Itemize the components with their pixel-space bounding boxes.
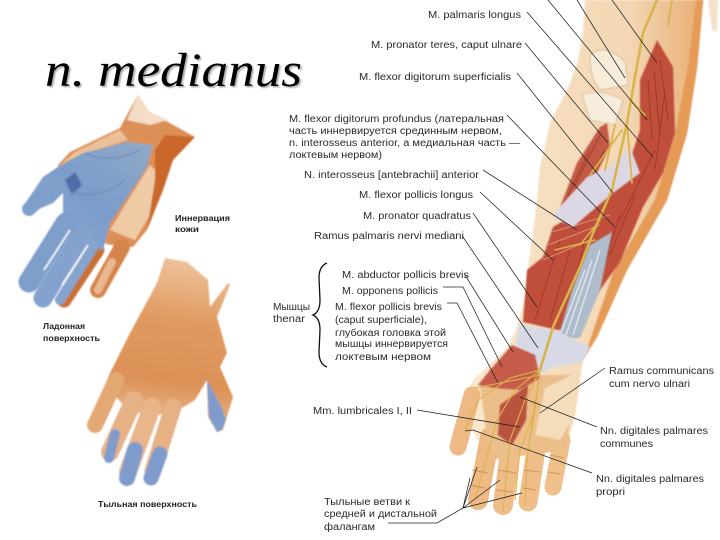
label: pronator quadratus: M. pronator quadratus xyxy=(363,211,471,222)
label: ramus communicans: cum nervo ulnari xyxy=(609,379,690,390)
label: flexor pollicis brevis: локтевым нервом xyxy=(335,352,431,363)
illustration: dorsal hand xyxy=(95,258,233,478)
orange ulnar edge xyxy=(147,135,195,230)
little finger xyxy=(98,247,122,290)
little finger xyxy=(553,440,562,487)
label: flexor pollicis brevis xyxy=(335,302,448,363)
ring finger xyxy=(528,443,537,502)
arm silhouette xyxy=(460,0,703,460)
label: ramus communicans: Ramus communicans xyxy=(609,366,714,377)
label: dorsal branches xyxy=(324,497,437,533)
label: digitales proprii: propri xyxy=(596,487,625,498)
label: dorsal branches: фалангам xyxy=(324,521,375,533)
label: dorsal branches: Тыльные ветви к xyxy=(324,497,411,508)
dorsal ring finger xyxy=(110,400,134,452)
median nerve trunk and branches xyxy=(465,0,672,510)
muscle fibre striping xyxy=(535,60,668,320)
label: flexor pollicis brevis: мышцы иннервируется xyxy=(335,339,448,350)
elbow bones xyxy=(590,50,628,90)
label: ramus communicans xyxy=(609,366,714,390)
label: thenar muscles: Мышцы xyxy=(273,302,310,313)
caption: palmar surface: Ладонная xyxy=(43,321,85,331)
blue half of ring finger xyxy=(60,246,94,300)
label: ramus palmaris: Ramus palmaris nervi mediani xyxy=(314,231,464,242)
label: flexor digitorum profundus xyxy=(289,114,520,161)
illustration: forearm and hand dissection xyxy=(458,0,718,510)
label: flexor digitorum profundus: локтевым нервом) xyxy=(289,150,382,161)
index finger xyxy=(478,437,490,500)
caption: dorsal surface: Тыльная поверхность xyxy=(98,499,197,509)
lower tendon bundle xyxy=(558,232,612,338)
thenar and palm muscles xyxy=(478,345,540,390)
label: thenar muscles xyxy=(273,302,310,325)
labels: forearm muscles and nerves xyxy=(273,10,714,533)
middle finger xyxy=(503,437,512,505)
label: opponens pollicis: M. opponens pollicis xyxy=(342,286,438,297)
label: flexor digitorum profundus: часть иннервируется срединным нервом, xyxy=(289,126,502,137)
big forearm muscle mass xyxy=(523,40,675,330)
caption: palmar surface xyxy=(43,321,100,343)
dorsal middle finger xyxy=(128,407,152,472)
label: thenar muscles: thenar xyxy=(273,314,306,325)
flexor retinaculum at wrist xyxy=(515,325,590,375)
labels: hand captions xyxy=(43,213,230,509)
label: dorsal branches: средней и дистальной xyxy=(324,509,437,520)
caption: skin innervation: кожи xyxy=(175,224,199,234)
title: n. medianus xyxy=(45,44,302,97)
label: pronator teres: M. pronator teres, caput ulnare xyxy=(371,40,522,51)
label: digitales communes: Nn. digitales palmares xyxy=(600,426,708,437)
blue thumb xyxy=(29,183,57,209)
blue sensory zone on palm xyxy=(24,142,153,250)
lavender tendon sheet xyxy=(553,147,640,227)
label: flexor pollicis brevis: M. flexor pollicis brevis xyxy=(335,302,442,313)
label: digitales communes xyxy=(600,426,708,450)
label: lumbricales: Mm. lumbricales I, II xyxy=(313,406,412,417)
caption: skin innervation xyxy=(175,213,230,234)
blue fingertip zones on dorsal hand xyxy=(207,380,226,432)
dorsal little finger xyxy=(95,380,116,425)
label: flexor pollicis brevis: глубокая головка этой xyxy=(335,327,446,339)
blue palm dark crease xyxy=(65,172,82,195)
white finger gaps xyxy=(44,230,112,285)
label: digitales proprii: Nn. digitales palmares xyxy=(596,474,704,485)
dorsal skin body with thumb xyxy=(105,258,233,432)
caption: palmar surface: поверхность xyxy=(43,333,100,343)
orange outer edge xyxy=(583,0,703,360)
blue middle finger xyxy=(43,235,82,298)
thumb xyxy=(458,395,472,447)
label: flexor pollicis longus: M. flexor pollicis longus xyxy=(359,190,473,201)
pale palm patch xyxy=(535,372,578,440)
pale thenar and wrist patches xyxy=(127,95,168,125)
label: flexor digitorum profundus: M. flexor digitorum profundus (латеральная xyxy=(289,114,504,125)
label: flexor digitorum profundus: n. interosseus anterior, а медиальная часть — xyxy=(289,138,520,149)
blue index finger xyxy=(29,223,66,282)
top right sliver xyxy=(708,0,718,32)
label: digitales communes: communes xyxy=(600,439,653,450)
leader lines xyxy=(388,0,657,523)
ring finger base orange xyxy=(64,250,97,300)
brace: thenar group xyxy=(313,263,327,367)
palm skin tone xyxy=(480,375,578,460)
illustration: palmar hand with median nerve skin area xyxy=(24,95,195,300)
label: digitales proprii xyxy=(596,474,704,498)
palm and wrist skin xyxy=(58,95,195,247)
finger creases xyxy=(470,455,564,492)
label: flexor digitorum superficialis: M. flexor digitorum superficialis xyxy=(359,72,511,83)
label: flexor pollicis brevis: (caput superficiale), xyxy=(335,315,427,326)
dorsal index finger xyxy=(153,407,173,471)
label: palmaris longus: M. palmaris longus xyxy=(428,10,521,21)
label: abductor pollicis brevis: M. abductor pollicis brevis xyxy=(342,270,469,281)
left upper muscle xyxy=(560,123,610,207)
caption: skin innervation: Иннервация xyxy=(175,213,230,223)
label: interosseus anterior: N. interosseus [antebrachii] anterior xyxy=(304,170,480,181)
